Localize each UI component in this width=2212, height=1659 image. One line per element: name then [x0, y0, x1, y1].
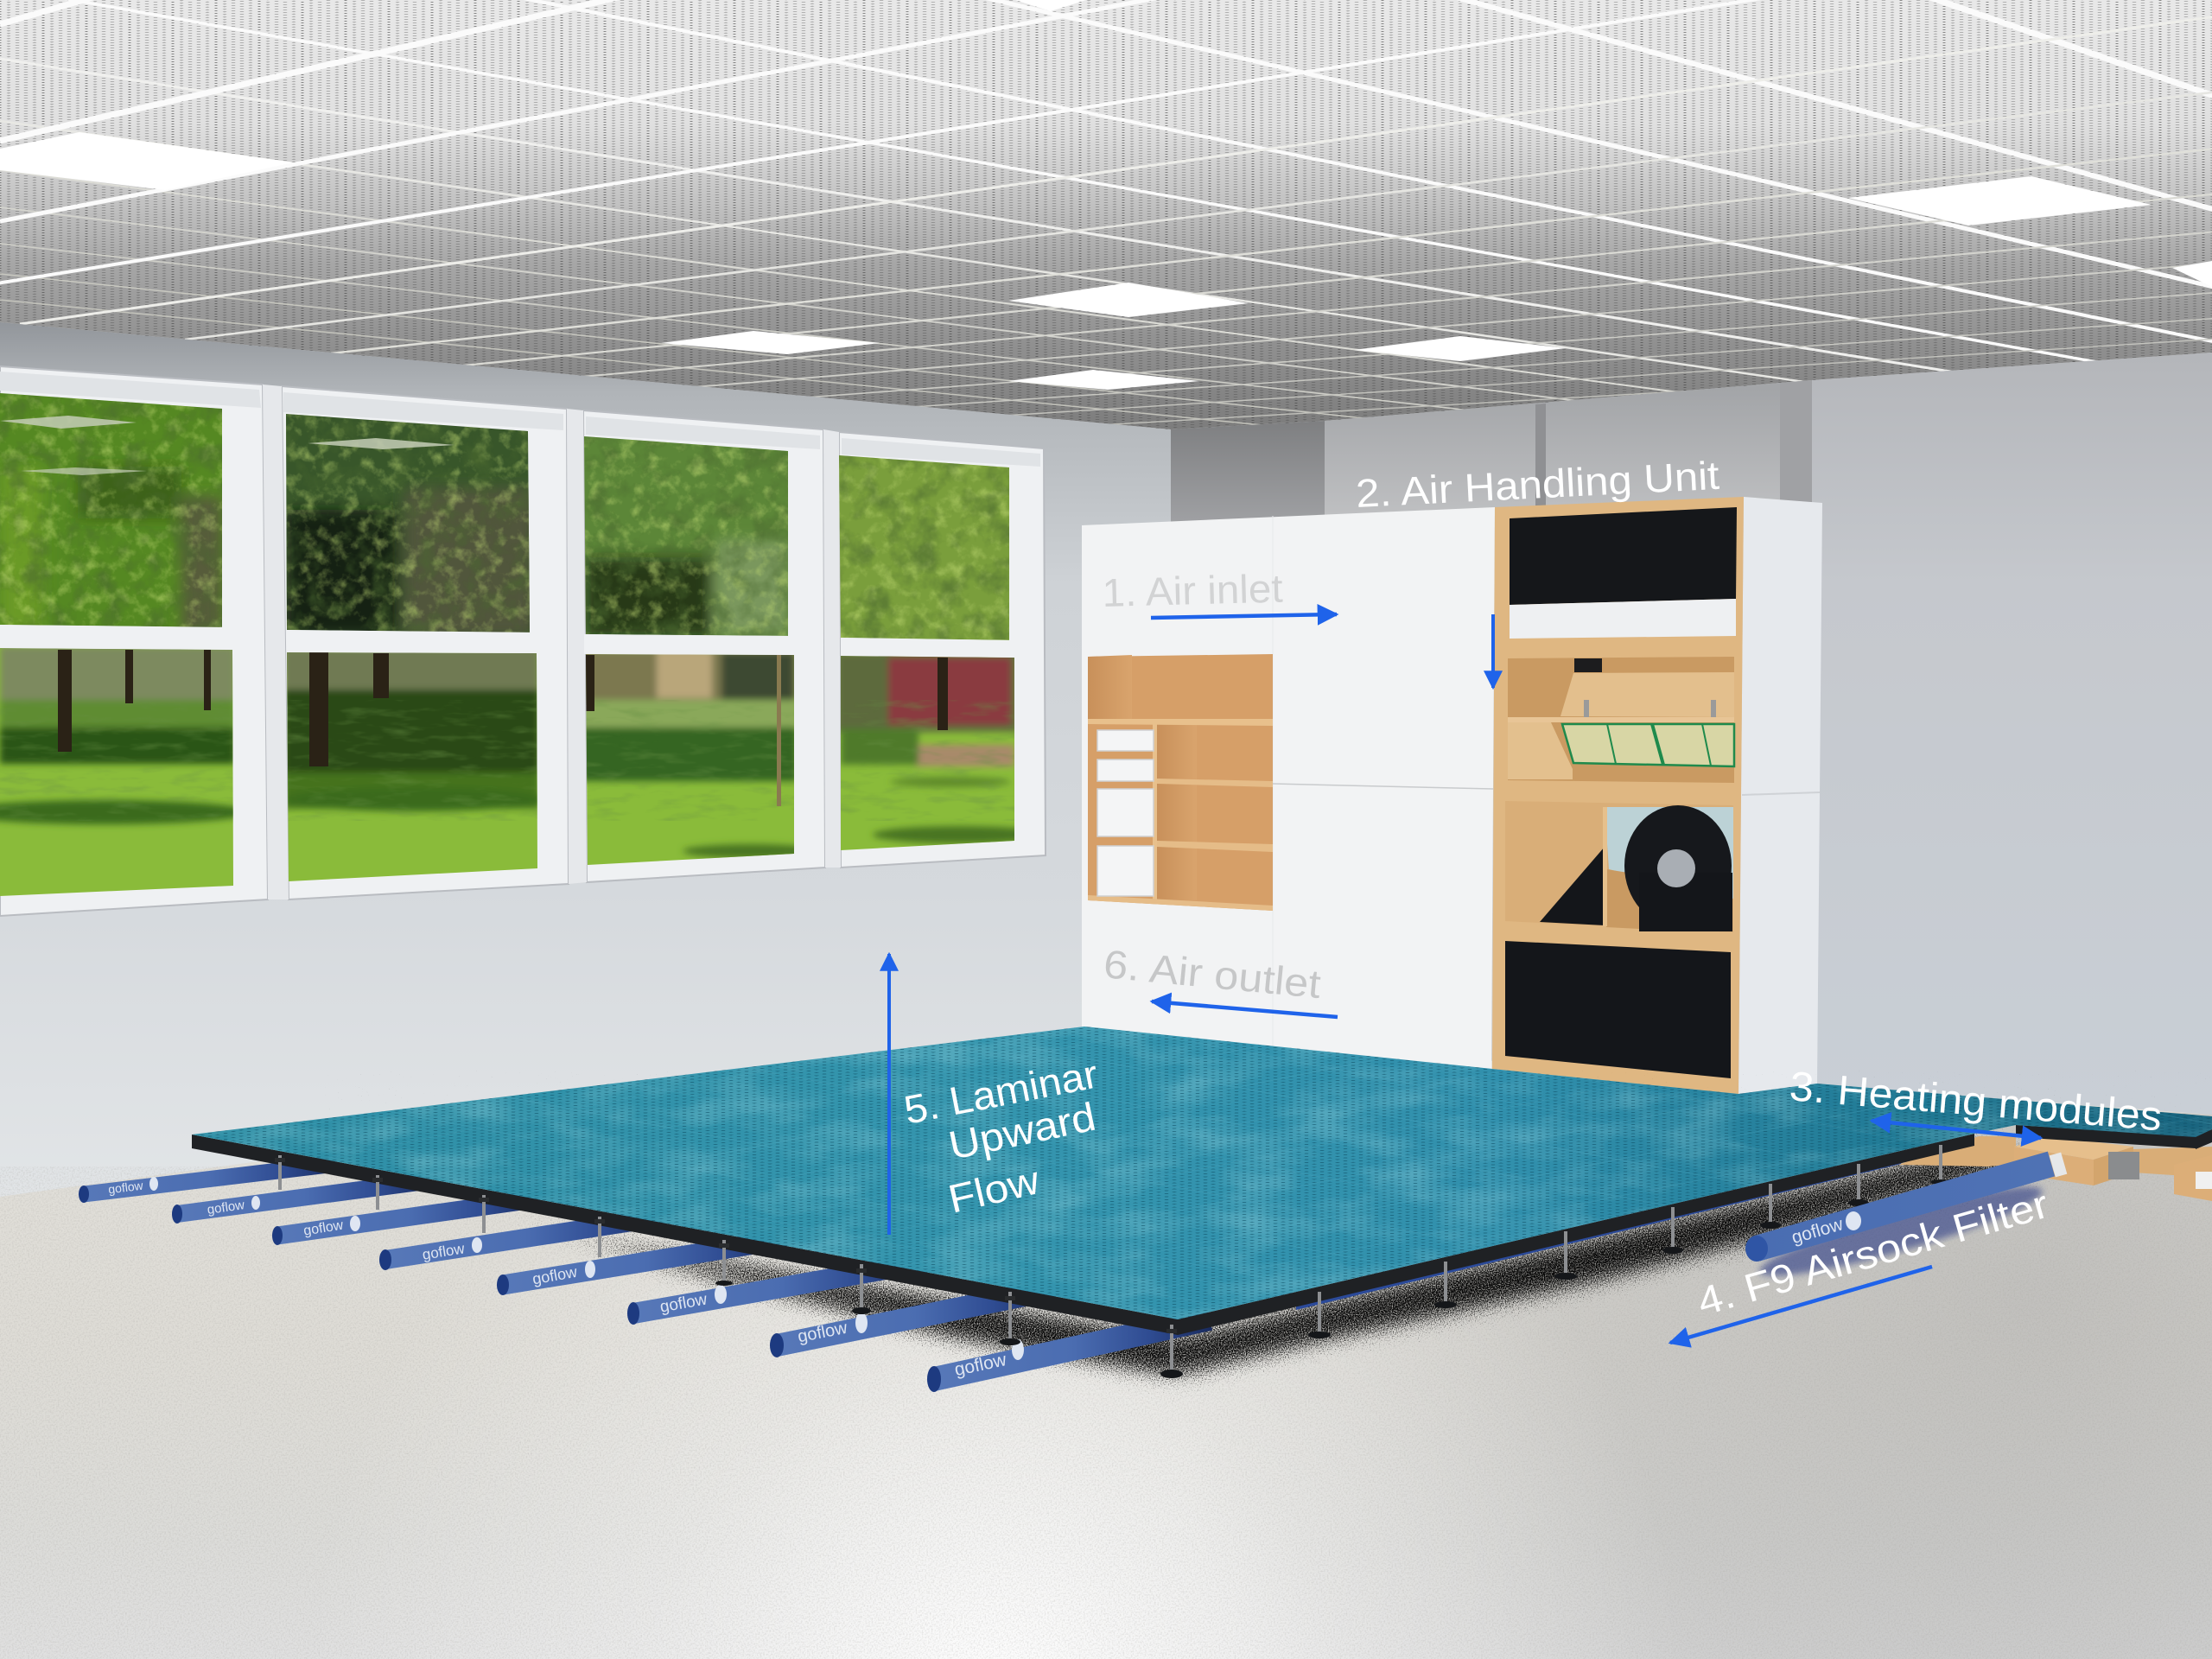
plywood frame	[1492, 497, 1744, 1094]
pedestals	[275, 1145, 1951, 1378]
airsock filter, right: goflow	[1789, 1214, 1846, 1248]
lawn lower panes	[0, 644, 1020, 903]
top black compartment	[1510, 507, 1737, 639]
floor	[0, 1037, 2212, 1659]
airsock 1: goflow	[107, 1179, 144, 1196]
open shelving niche	[1088, 654, 1273, 911]
airsock 3: goflow	[302, 1217, 345, 1239]
label: 2. Air Handling Unit: 2. Air Handling Unit	[1355, 453, 1720, 516]
label: 6. Air outlet: 6. Air outlet	[1102, 941, 1323, 1007]
airsock 4: goflow	[421, 1240, 467, 1263]
gaps between frames	[263, 385, 841, 899]
speckled shadow below raised floor	[484, 1142, 2074, 1382]
filter compartment	[1508, 657, 1734, 783]
tree trunks	[58, 650, 948, 806]
label: 3. Heating modules: 3. Heating modules	[1788, 1064, 2164, 1140]
right wall	[1812, 353, 2212, 1123]
raised floor edges	[192, 1125, 2212, 1335]
fan compartment	[1505, 801, 1733, 932]
label: 1. Air inlet: 1. Air inlet	[1102, 566, 1283, 615]
airsock 1	[79, 1164, 336, 1203]
bottom black compartment	[1505, 941, 1731, 1078]
airsock 5	[497, 1239, 786, 1295]
label: 5. Laminar Upward Flow: 5. Laminar	[900, 1051, 1102, 1133]
airsock 7	[770, 1289, 1054, 1357]
raised floor surface	[173, 1020, 2212, 1331]
airsock 8	[927, 1319, 1210, 1392]
airsock filter, right	[1745, 1153, 2067, 1290]
airsock filters, left row	[79, 1164, 1210, 1392]
window mullions	[0, 625, 1016, 658]
label: 5. Laminar Upward Flow: Flow	[944, 1157, 1044, 1222]
arrow: down through unit	[1491, 614, 1495, 688]
storage cabinet wall	[1082, 507, 1495, 1069]
airsock 5: goflow	[531, 1263, 579, 1287]
airsock 4	[379, 1217, 665, 1270]
unit side panel	[1738, 497, 1822, 1094]
arrow: heating modules double-headed	[1872, 1121, 2041, 1138]
label: 4. F9 Airsock Filter: 4. F9 Airsock Filter	[1692, 1181, 2053, 1325]
window head shading	[0, 372, 1040, 467]
arrow: upward flow	[887, 954, 891, 1235]
label: 5. Laminar Upward Flow	[900, 1051, 1102, 1222]
ceiling light panels	[0, 0, 2212, 390]
airsock 8: goflow	[953, 1350, 1009, 1380]
tree canopy upper panes	[0, 380, 1013, 644]
window wall	[0, 322, 1171, 1197]
airsock 6	[627, 1262, 925, 1325]
arrow: air outlet	[1152, 1001, 1338, 1017]
arrow: airsock direction	[1670, 1267, 1932, 1343]
airsock 7: goflow	[796, 1319, 849, 1346]
ceiling	[0, 0, 2212, 429]
air handling unit	[1492, 497, 1822, 1094]
label: 5. Laminar Upward Flow: Upward	[944, 1094, 1099, 1168]
airsock 2	[172, 1180, 432, 1224]
heating modules	[1898, 1136, 2212, 1201]
airsock 3	[272, 1198, 540, 1245]
window frames	[0, 366, 1046, 916]
windows	[0, 366, 1054, 916]
end wall above cabinets	[1171, 380, 1812, 531]
airsock 2: goflow	[207, 1198, 245, 1217]
outdoor view through glass	[0, 380, 1054, 903]
airsock under right edge	[1296, 1158, 1901, 1310]
airsock 6: goflow	[658, 1290, 709, 1317]
arrow: air inlet	[1151, 614, 1337, 618]
